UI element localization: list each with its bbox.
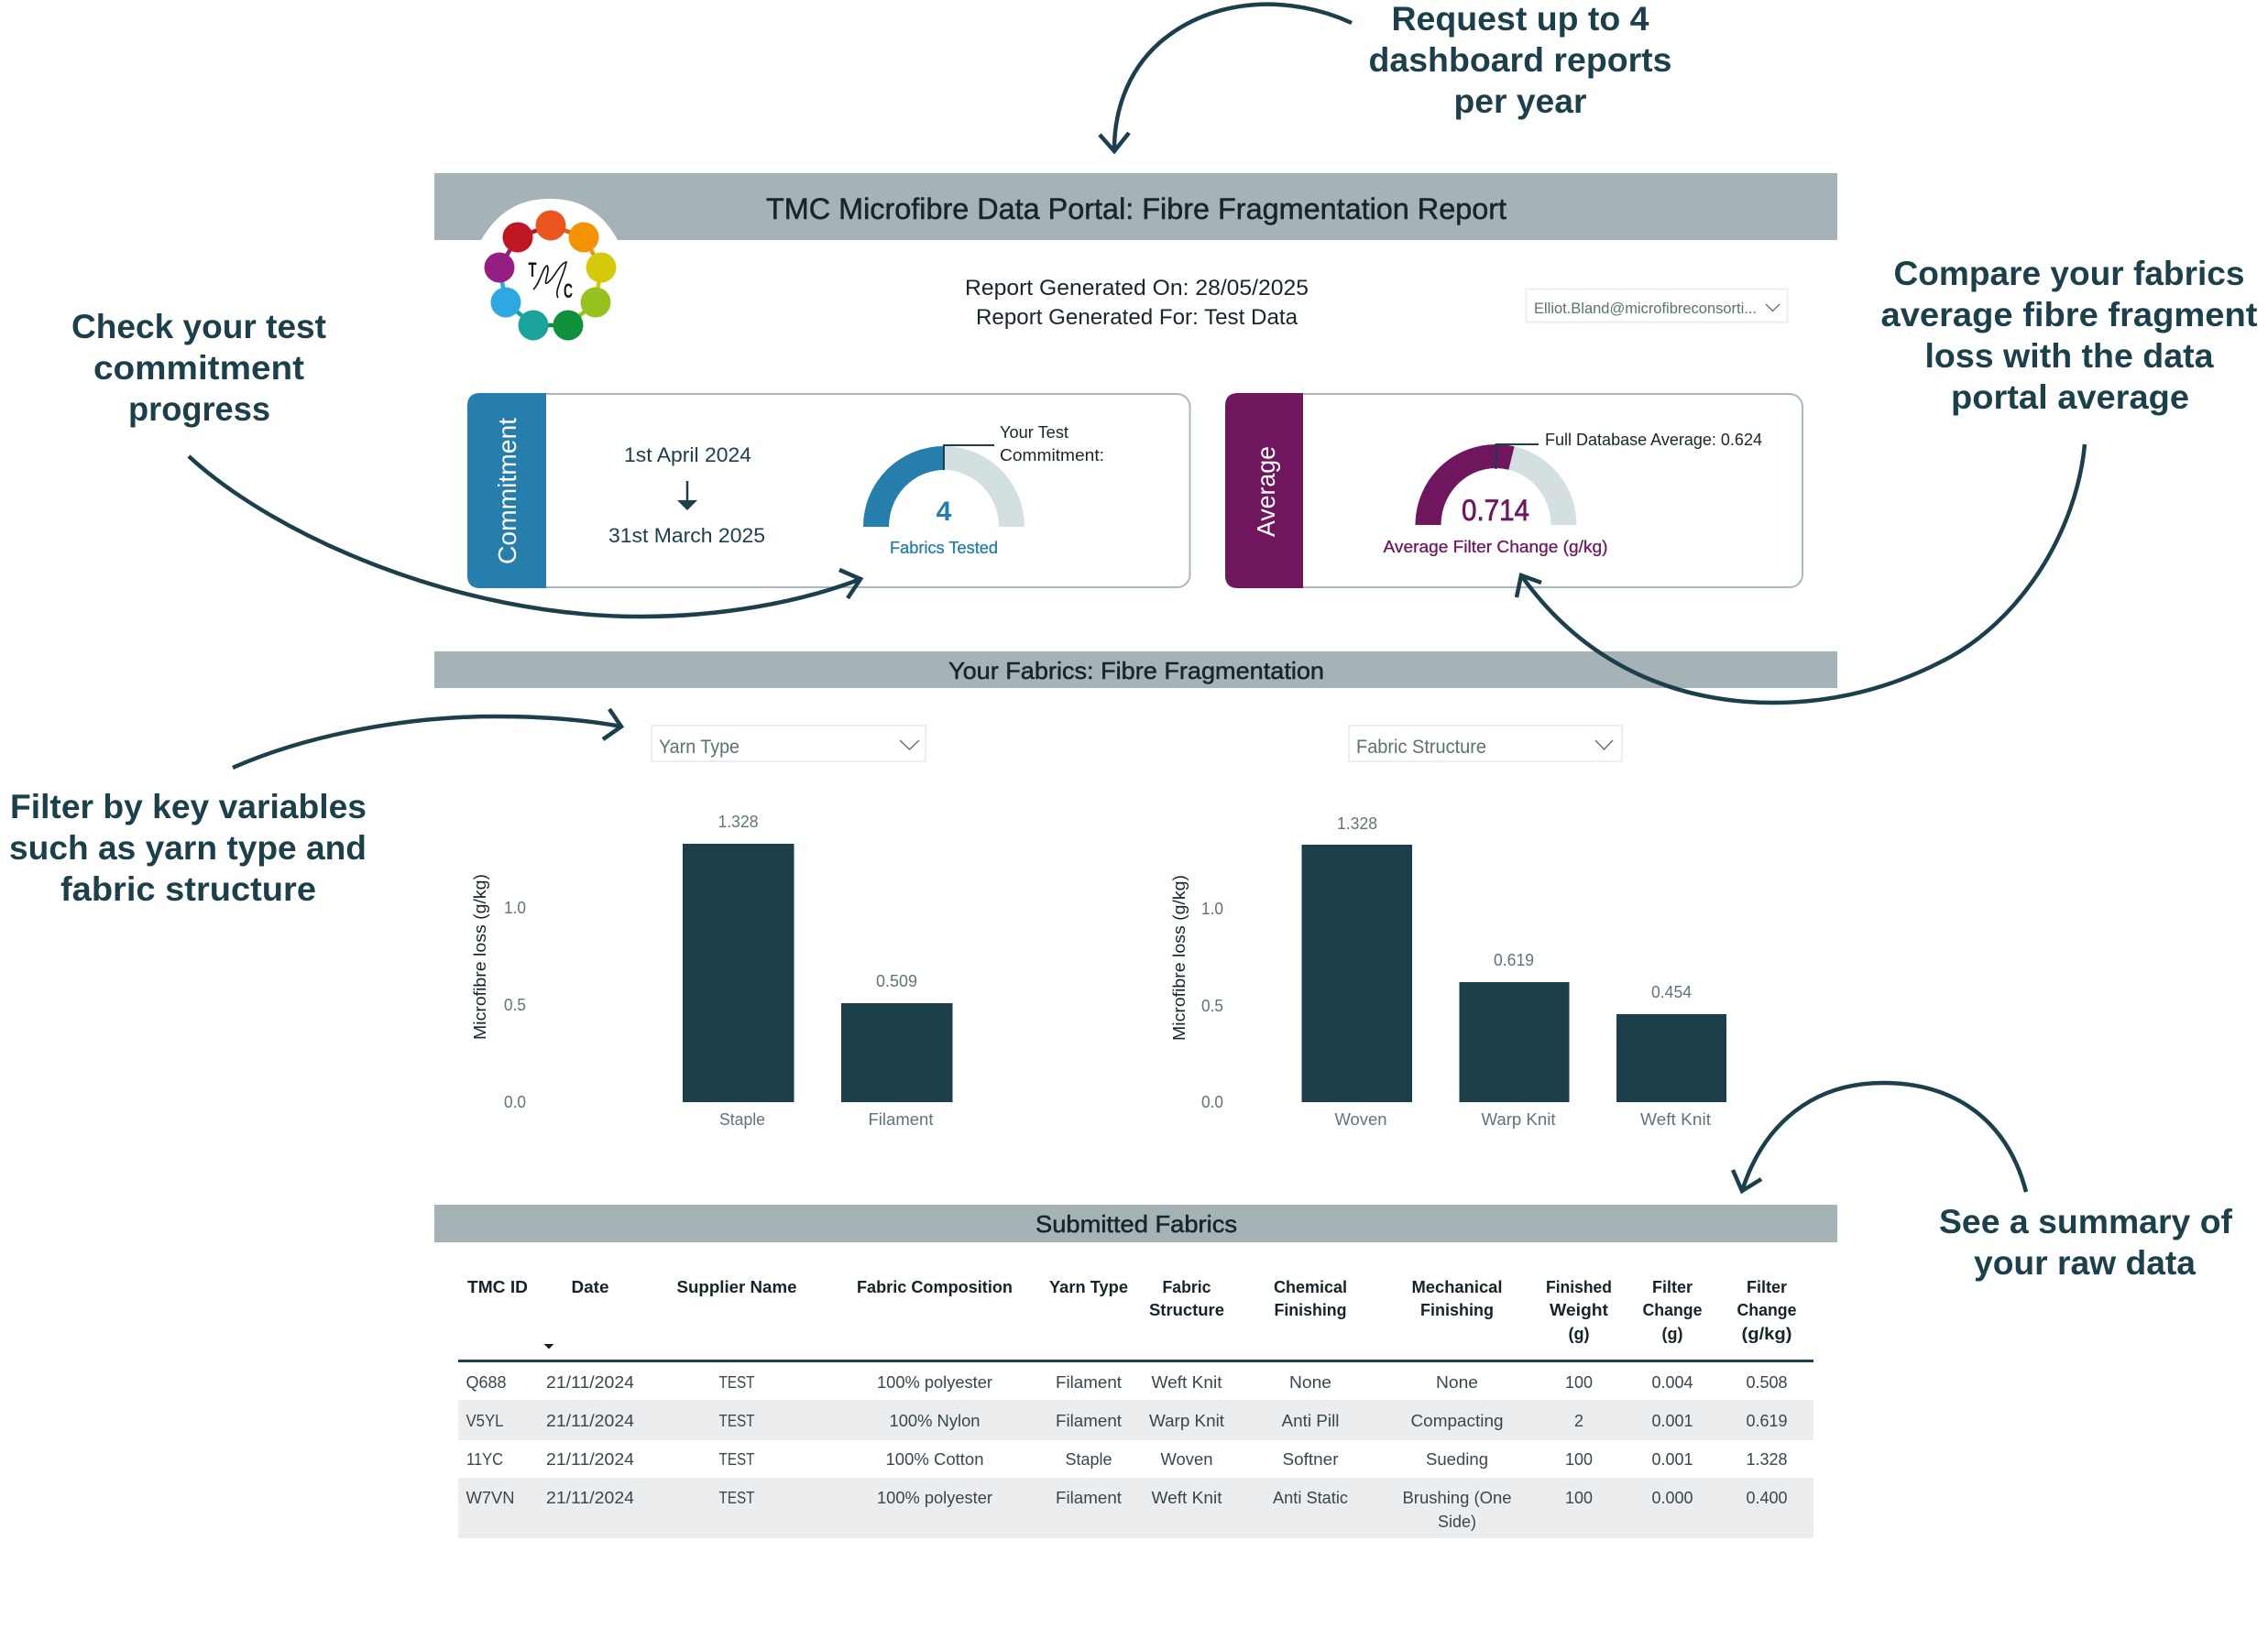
table header: TMC ID: [467, 1278, 528, 1296]
row: 11YC: Sueding: [1426, 1450, 1488, 1469]
filter: fabric structure: [1349, 726, 1622, 761]
row: W7VN: Brushing (One: [1402, 1489, 1512, 1507]
table header: Yarn Type: [1049, 1278, 1128, 1296]
table header: Filter: [1652, 1278, 1693, 1296]
row: Q688: None: [1289, 1373, 1331, 1392]
panel: commitment: [467, 393, 1189, 588]
callout: request reports: Request up to 4: [1391, 0, 1649, 38]
bar: weft knit: Weft Knit: [1640, 1110, 1711, 1129]
gauge: fabrics tested: Fabrics Tested: [890, 539, 998, 557]
table header: Date: [572, 1278, 608, 1296]
table header: Finished: [1546, 1278, 1612, 1296]
callout: test commitment: commitment: [93, 349, 304, 387]
table header: (g): [1569, 1325, 1590, 1343]
row: W7VN: 0.400: [1747, 1489, 1787, 1507]
user dropdown: [1527, 290, 1787, 322]
y axis ticks: 0.5: [1201, 997, 1223, 1015]
y axis ticks: 1.0: [504, 899, 526, 917]
gauge: average filter change: [1384, 431, 1762, 556]
row: 11YC: Softner: [1283, 1450, 1338, 1469]
gauge: average filter change: Average Filter Change (g/kg): [1384, 538, 1607, 556]
row: V5YL: 100% Nylon: [889, 1412, 981, 1430]
arrow: summary callout to table: [1733, 1083, 2026, 1192]
row: V5YL: 0.001: [1651, 1412, 1693, 1430]
table header: Filter: [1747, 1278, 1787, 1296]
y axis title: Microfibre loss (g/kg): [1170, 875, 1189, 1041]
y axis ticks: 0.0: [1201, 1093, 1223, 1111]
bar chart: fabric structure: [1170, 814, 1726, 1129]
bar: staple: 1.328: [718, 813, 759, 831]
header banner: [434, 173, 1837, 240]
table header: Fabric: [1162, 1278, 1211, 1296]
row: 11YC: 100% Cotton: [885, 1450, 984, 1469]
filter: yarn type: Yarn Type: [659, 737, 740, 758]
row: Q688: 21/11/2024: [546, 1373, 634, 1392]
row: W7VN: TEST: [718, 1489, 755, 1507]
y axis ticks: 0.0: [504, 1093, 526, 1111]
section heading: your fabrics: Your Fabrics: Fibre Fragmentation: [948, 657, 1324, 684]
y axis ticks: [1201, 900, 1223, 1111]
gauge: fabrics tested: [863, 423, 1104, 557]
average label: Average: [1252, 446, 1280, 537]
bar: woven: 1.328: [1337, 814, 1377, 833]
row: V5YL: Compacting: [1411, 1412, 1503, 1430]
bar: woven: Woven: [1334, 1110, 1387, 1129]
table header: Chemical: [1274, 1278, 1347, 1296]
callout: filter variables: [9, 788, 367, 908]
row: V5YL: Filament: [1056, 1412, 1122, 1430]
callout: compare average: loss with the data: [1924, 337, 2214, 375]
callout: raw data summary: your raw data: [1974, 1244, 2196, 1282]
report generated text: Report Generated On: 28/05/2025: [965, 276, 1309, 300]
row: Q688: TEST: [718, 1373, 755, 1392]
callout: raw data summary: See a summary of: [1939, 1203, 2233, 1240]
callout: filter variables: Filter by key variables: [10, 788, 367, 825]
callout: request reports: [1369, 0, 1671, 120]
row: 11YC: Staple: [1065, 1450, 1112, 1469]
table header: Change: [1642, 1301, 1703, 1319]
callout: test commitment: Check your test: [71, 308, 326, 345]
gauge: fabrics tested: 4: [937, 497, 952, 527]
row: W7VN: 21/11/2024: [546, 1489, 634, 1507]
callout: request reports: per year: [1453, 82, 1587, 120]
row: 11YC: 0.001: [1651, 1450, 1693, 1469]
bar: weft knit: 0.454: [1651, 983, 1692, 1001]
row: Q688: Weft Knit: [1151, 1373, 1222, 1392]
gauge: fabrics tested: Commitment:: [1000, 446, 1104, 464]
row: Q688: None: [1436, 1373, 1478, 1392]
filter: fabric structure: Fabric Structure: [1356, 737, 1486, 758]
user dropdown: Elliot.Bland@microfibreconsorti...: [1534, 300, 1757, 317]
row: Q688: 0.508: [1747, 1373, 1787, 1392]
row: Q688: Q688: [466, 1373, 506, 1392]
row: V5YL: 21/11/2024: [546, 1412, 634, 1430]
table: submitted fabrics: [458, 1278, 1813, 1538]
row: W7VN: Side): [1438, 1513, 1476, 1531]
report generated text: Report Generated For: Test Data: [976, 305, 1298, 330]
bar: warp knit: [1459, 951, 1569, 1129]
row: V5YL: TEST: [718, 1412, 755, 1430]
row: 11YC: 11YC: [466, 1450, 503, 1469]
row: V5YL: V5YL: [466, 1412, 504, 1430]
y axis title: Microfibre loss (g/kg): [471, 874, 489, 1040]
y axis ticks: [504, 899, 526, 1111]
row: Q688: 0.004: [1651, 1373, 1693, 1392]
table header: (g): [1662, 1325, 1683, 1343]
row: W7VN: 100% polyester: [877, 1489, 992, 1507]
logo: TMC ring: T: [528, 258, 537, 281]
row: 11YC: [466, 1450, 1787, 1469]
arrow: compare callout to average gauge: [1517, 444, 2085, 703]
row: 11YC: 100: [1565, 1450, 1593, 1469]
callout: compare average: Compare your fabrics: [1893, 255, 2245, 292]
row: V5YL: 2: [1574, 1412, 1583, 1430]
filter: yarn type: [652, 726, 926, 761]
callout: test commitment: [71, 308, 326, 428]
row: Q688: 100: [1565, 1373, 1593, 1392]
callout: compare average: [1880, 255, 2258, 416]
row: 11YC: TEST: [718, 1450, 755, 1469]
row: W7VN: 0.000: [1651, 1489, 1693, 1507]
row: 11YC: 21/11/2024: [546, 1450, 634, 1469]
logo: TMC ring: [481, 199, 618, 341]
table header: Fabric Composition: [857, 1278, 1013, 1296]
table header: Finishing: [1274, 1301, 1347, 1319]
callout: request reports: dashboard reports: [1369, 41, 1671, 79]
row: V5YL: Anti Pill: [1281, 1412, 1340, 1430]
row: V5YL: [458, 1400, 1813, 1440]
bar: filament: [841, 972, 953, 1129]
table header: Supplier Name: [676, 1278, 797, 1296]
bar: warp knit: Warp Knit: [1481, 1110, 1556, 1129]
row: 11YC: Woven: [1160, 1450, 1213, 1469]
callout: compare average: portal average: [1951, 378, 2189, 416]
row: V5YL: 0.619: [1747, 1412, 1787, 1430]
row: 11YC: 1.328: [1747, 1450, 1787, 1469]
table header: Finishing: [1420, 1301, 1494, 1319]
callout: filter variables: fabric structure: [60, 870, 316, 908]
row: V5YL: Warp Knit: [1149, 1412, 1224, 1430]
y axis ticks: 1.0: [1201, 900, 1223, 918]
table header: Structure: [1149, 1301, 1224, 1319]
row: W7VN: [458, 1478, 1813, 1538]
commitment dates: 31st March 2025: [608, 524, 765, 547]
table header: [458, 1278, 1813, 1362]
bar chart: yarn type: [471, 813, 953, 1129]
panel: average: [1225, 393, 1802, 588]
row: Q688: Filament: [1056, 1373, 1122, 1392]
row: W7VN: W7VN: [466, 1489, 515, 1507]
row: Q688: [466, 1373, 1787, 1392]
table header: (g/kg): [1741, 1325, 1792, 1343]
section heading: submitted fabrics: Submitted Fabrics: [1035, 1210, 1237, 1238]
logo: TMC ring: C: [564, 279, 573, 302]
commitment dates: 1st April 2024: [624, 443, 751, 466]
table header: Mechanical: [1411, 1278, 1503, 1296]
callout: filter variables: such as yarn type and: [9, 829, 367, 867]
commitment dates: [608, 443, 765, 547]
table header: Weight: [1550, 1301, 1608, 1319]
table header: Change: [1737, 1301, 1796, 1319]
header banner: TMC Microfibre Data Portal: Fibre Fragmentation Report: [766, 192, 1507, 225]
callout: test commitment: progress: [128, 390, 270, 428]
bar: filament: Filament: [869, 1110, 933, 1129]
row: Q688: 100% polyester: [877, 1373, 992, 1392]
row: W7VN: Filament: [1056, 1489, 1122, 1507]
bar: filament: 0.509: [876, 972, 917, 990]
bar: staple: Staple: [719, 1110, 765, 1129]
arrow: request reports to header: [1100, 5, 1352, 151]
row: W7VN: Weft Knit: [1151, 1489, 1222, 1507]
bar: woven: [1301, 814, 1412, 1129]
y axis ticks: 0.5: [504, 996, 526, 1014]
report generated text: [965, 276, 1309, 330]
callout: compare average: average fibre fragment: [1880, 296, 2258, 333]
row: W7VN: 100: [1565, 1489, 1593, 1507]
bar: staple: [683, 813, 794, 1129]
gauge: fabrics tested: Your Test: [1000, 423, 1068, 442]
commitment label: Commitment: [493, 418, 521, 564]
bar: weft knit: [1616, 983, 1726, 1129]
arrow: commitment callout to gauge: [189, 456, 860, 617]
section heading: submitted fabrics: [434, 1205, 1837, 1242]
callout: raw data summary: [1939, 1203, 2233, 1282]
section heading: your fabrics: [434, 651, 1837, 688]
row: W7VN: Anti Static: [1273, 1489, 1348, 1507]
bar: warp knit: 0.619: [1494, 951, 1534, 969]
gauge: average filter change: Full Database Average: 0.624: [1545, 431, 1762, 449]
gauge: average filter change: 0.714: [1462, 494, 1529, 527]
arrow: filter callout to dropdown: [233, 709, 621, 768]
